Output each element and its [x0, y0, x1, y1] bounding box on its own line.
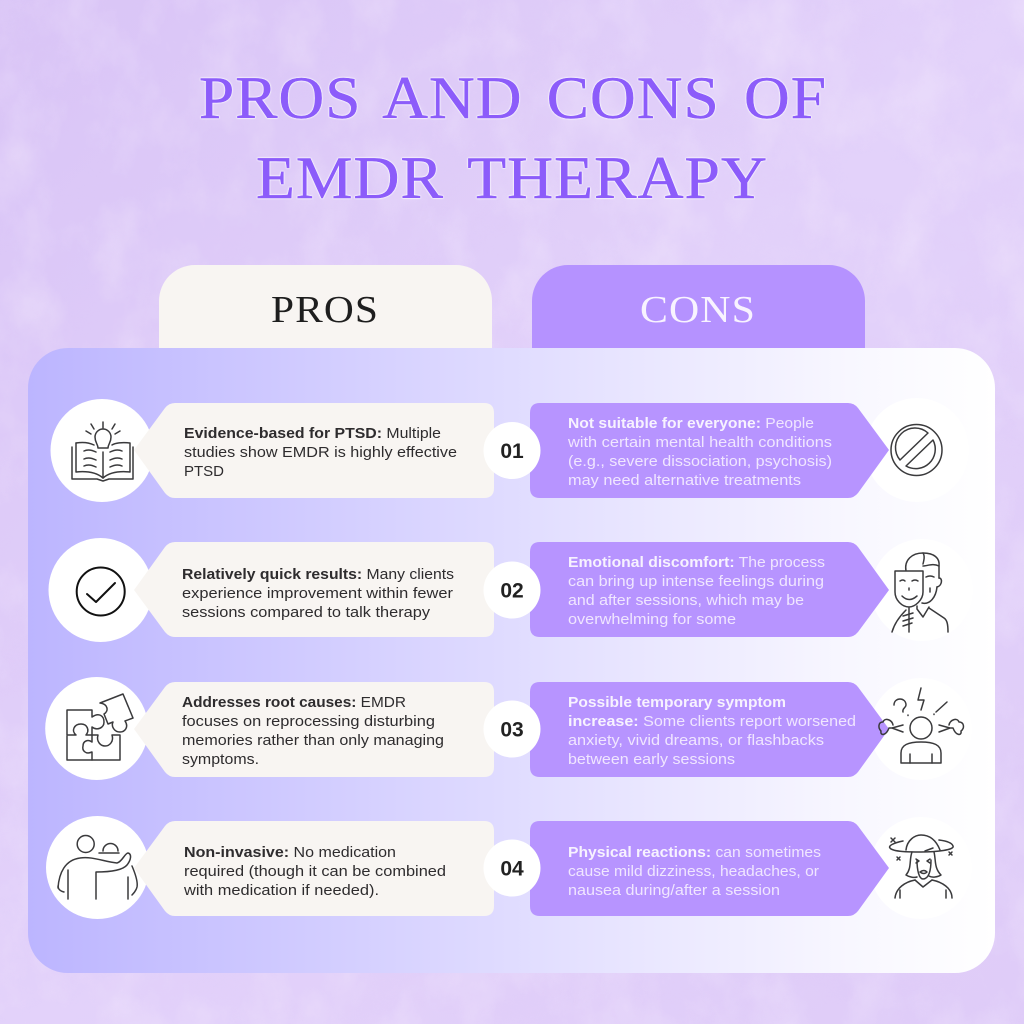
pros card 2: sessions compared to talk therapy [182, 604, 431, 621]
pros card 1 [134, 403, 494, 498]
pros card 1: PTSD [184, 463, 224, 480]
row 1 [50, 399, 942, 502]
title [199, 65, 827, 211]
cons card 4: Physical reactions: can sometimes [568, 844, 821, 861]
pros card 2: experience improvement within fewer [182, 585, 453, 602]
cons card 3: increase: Some clients report worsened [568, 713, 856, 730]
row 4 [46, 816, 953, 919]
tab: cons [532, 265, 865, 348]
icon: open book with lightbulb [50, 399, 154, 502]
cons card 4 [530, 821, 889, 916]
pros card 1: Evidence-based for PTSD: Multiple [184, 425, 441, 442]
number badge 01 [484, 422, 540, 479]
cons card 2 [530, 542, 889, 637]
cons card 3 [530, 682, 889, 777]
icon: stressed person with steam and lightning [879, 688, 963, 763]
cons card 2: and after sessions, which may be [568, 592, 804, 609]
pros card 3: Addresses root causes: EMDR [182, 694, 406, 711]
cons card 3: anxiety, vivid dreams, or flashbacks [568, 732, 824, 749]
number badge 03: 03 [500, 718, 524, 742]
icon: supportive friend with arm on shoulder [46, 816, 149, 919]
number badge 03 [484, 700, 540, 758]
cons card 2: overwhelming for some [568, 611, 736, 628]
tab: pros [159, 265, 492, 348]
icon: check mark in circle [48, 538, 152, 642]
number badge 04: 04 [500, 858, 524, 880]
pros card 3: focuses on reprocessing disturbing [182, 713, 435, 730]
cons card 1: Not suitable for everyone: People [568, 415, 814, 432]
number badge 02: 02 [500, 580, 524, 602]
pros card 1: studies show EMDR is highly effective [184, 444, 457, 461]
title: PROS AND CONS OF [199, 65, 827, 131]
pros card 4: required (though it can be combined [184, 863, 446, 880]
icon: prohibited sign [891, 424, 942, 476]
pros card 2: Relatively quick results: Many clients [182, 566, 454, 583]
icon: person holding a smiling mask [892, 553, 948, 632]
number badge 01: 01 [500, 440, 524, 463]
pros card 2 [134, 542, 494, 637]
number badge 02 [484, 562, 540, 618]
cons card 1: with certain mental health conditions [567, 434, 832, 451]
icon: puzzle pieces [45, 677, 148, 780]
main panel [28, 348, 995, 973]
number badge 04 [484, 840, 540, 896]
pros card 3 [134, 682, 494, 777]
pros card 3: symptoms. [182, 751, 259, 768]
icon: dizzy woman with hat [890, 835, 953, 898]
tab: pros: PROS [271, 289, 379, 331]
cons card 4: nausea during/after a session [568, 882, 780, 899]
pros card 4 [134, 821, 494, 916]
row 3 [45, 677, 963, 780]
cons card 1: (e.g., severe dissociation, psychosis) [568, 453, 832, 470]
pros card 4: Non-invasive: No medication [184, 844, 396, 861]
row 2 [48, 538, 948, 642]
title: EMDR THERAPY [256, 145, 768, 211]
cons card 2: Emotional discomfort: The process [568, 554, 825, 571]
cons card 1 [530, 403, 889, 498]
cons card 4: cause mild dizziness, headaches, or [568, 863, 819, 880]
cons card 2: can bring up intense feelings during [568, 573, 824, 590]
tab: cons: CONS [640, 289, 756, 331]
pros card 4: with medication if needed). [183, 882, 379, 899]
cons card 1: may need alternative treatments [568, 472, 801, 489]
cons card 3: Possible temporary symptom [568, 694, 786, 711]
cons card 3: between early sessions [568, 751, 735, 768]
pros card 3: memories rather than only managing [182, 732, 444, 749]
white circles behind the cons icons [865, 398, 973, 919]
